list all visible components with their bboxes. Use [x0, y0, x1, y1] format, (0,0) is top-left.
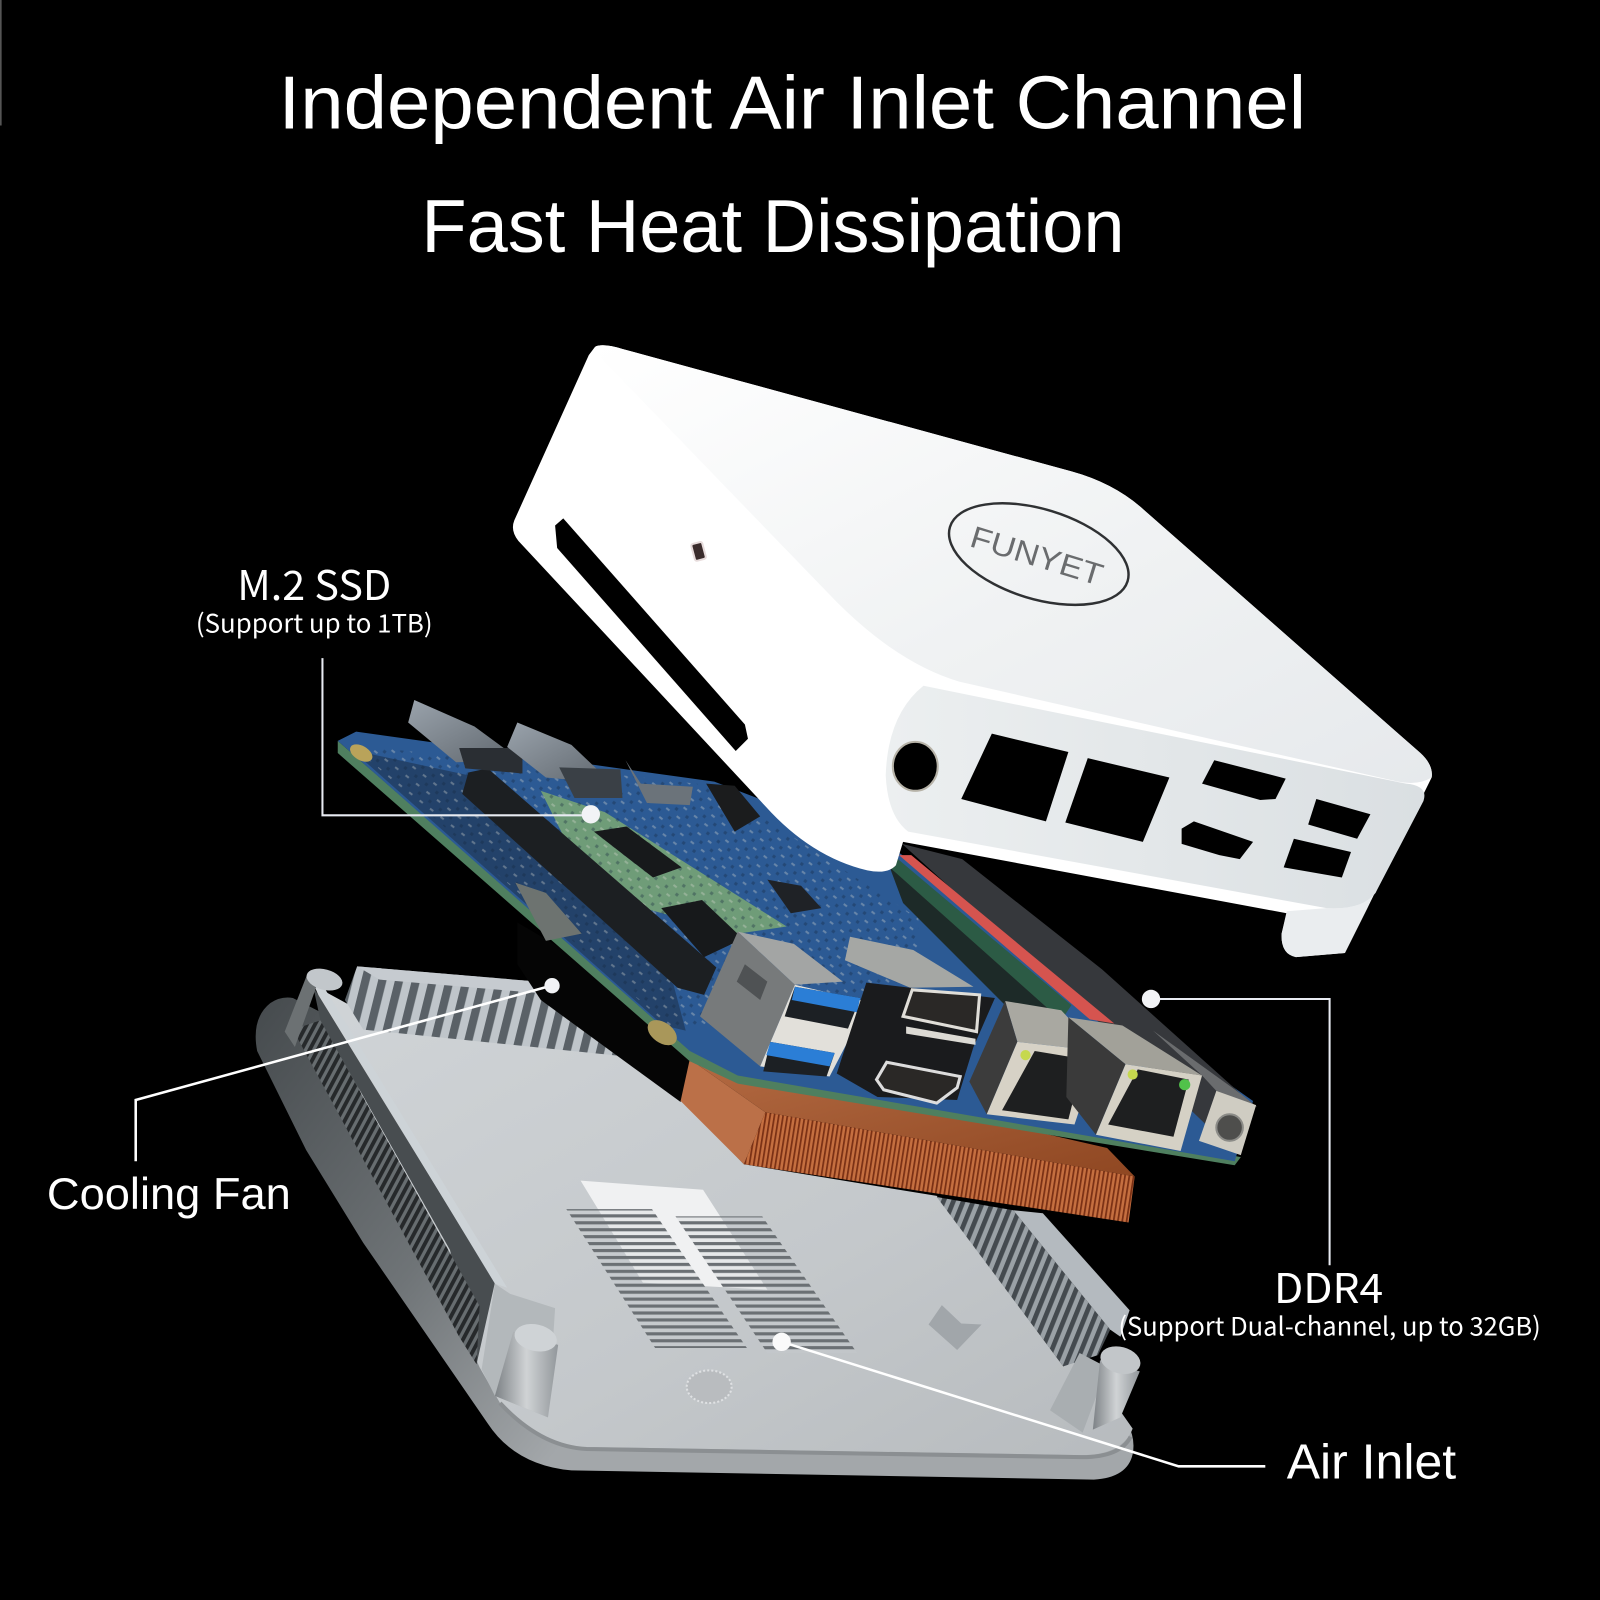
- callout: air inlet: [772, 1333, 1457, 1490]
- funyet logo: [937, 484, 1141, 624]
- outer rim: [256, 998, 1133, 1480]
- wall inner band: [313, 987, 495, 1364]
- lid top surface: [595, 345, 1432, 783]
- displayport socket: [903, 990, 980, 1032]
- logo text: FUNYET: [966, 520, 1107, 593]
- led green: [1179, 1079, 1190, 1090]
- dual usb connector: [700, 932, 868, 1077]
- right fins: [937, 1197, 1110, 1366]
- side card slot: [555, 518, 748, 751]
- led yellow: [1020, 1050, 1031, 1060]
- rj45 side: [1066, 1017, 1126, 1135]
- darker left strip: [352, 750, 686, 1031]
- usb front frame: [760, 985, 868, 1077]
- dot: [772, 1333, 791, 1351]
- post right block: [1050, 1353, 1107, 1433]
- rj45 port: [1002, 1051, 1084, 1119]
- rj45 top: [1005, 1001, 1099, 1051]
- rear fins: [345, 966, 622, 1056]
- label: Cooling Fan: [47, 1168, 291, 1219]
- rj45 front: [1096, 1064, 1202, 1151]
- tower black housing: [837, 983, 995, 1100]
- label: DDR4: [1274, 1256, 1383, 1315]
- rj45 connector 2: [1066, 1017, 1202, 1151]
- cooling fan housing: [517, 922, 690, 1102]
- memory red stripe: [899, 855, 1114, 1023]
- label: Air Inlet: [1287, 1436, 1457, 1490]
- PCB components speckle: [352, 745, 918, 1031]
- rear connector 1: [408, 700, 520, 762]
- port cutout hdmi top: [1202, 760, 1286, 800]
- PCB surface: [338, 732, 1253, 1161]
- callout: cooling fan: [47, 978, 560, 1219]
- rj45 port: [1108, 1069, 1189, 1137]
- leader line: [1151, 999, 1330, 1265]
- rj45 top: [1068, 1017, 1202, 1076]
- memory dark base: [890, 867, 1082, 1031]
- memory module pcb edge: [890, 859, 1071, 1020]
- grey rear edge near jack: [1153, 1031, 1257, 1107]
- bottom rim groove: [500, 1403, 1131, 1457]
- usb metal top: [738, 932, 843, 985]
- usb metal side: [700, 932, 795, 1066]
- green PCB area: [541, 791, 787, 934]
- rj45 connector 1: [969, 1001, 1099, 1124]
- tower top metal: [845, 937, 973, 988]
- copper top with heat pipe: [690, 1059, 1135, 1177]
- leader line: [782, 1342, 1265, 1466]
- mounting hole front: [643, 1015, 681, 1050]
- port cutout small bottom: [1284, 839, 1351, 878]
- rj45 side: [969, 1001, 1017, 1114]
- port cutout hdmi bottom: [1182, 821, 1253, 859]
- emblem on base: [687, 1370, 732, 1403]
- memory module: [890, 844, 1241, 1133]
- copper heat sink: [681, 1059, 1135, 1222]
- screw post left: [512, 1320, 559, 1355]
- leader line: [322, 658, 591, 815]
- jack body: [1199, 1091, 1256, 1155]
- port cutout small top: [1308, 799, 1370, 839]
- base floor: [314, 986, 1133, 1455]
- audio jack hole: [893, 742, 938, 791]
- label: M.2 SSD: [237, 553, 391, 612]
- post center: [929, 1305, 982, 1350]
- copper fin face: [744, 1112, 1135, 1222]
- hdmi socket: [877, 1062, 960, 1103]
- rear black capacitor: [706, 784, 760, 832]
- post top left: [285, 974, 316, 1047]
- thin edge line top left: [0, 0, 2, 126]
- rear connector 2 dark base: [559, 767, 622, 798]
- led yellow: [1128, 1069, 1138, 1080]
- recessed port panel: [886, 686, 1424, 908]
- usb side vent: [737, 964, 767, 1000]
- motherboard: [338, 700, 1257, 1165]
- inductor: [515, 883, 582, 941]
- display and hdmi connector tower: [837, 937, 995, 1103]
- rear connector 2: [507, 722, 612, 784]
- post top left cap: [304, 965, 345, 994]
- memory body: [902, 844, 1241, 1133]
- displayport lower bar: [906, 1027, 976, 1045]
- led green: [1076, 1061, 1087, 1072]
- title line 1: Independent Air Inlet Channel: [279, 62, 1306, 146]
- sublabel: (Support Dual-channel, up to 32GB): [1118, 1307, 1541, 1344]
- dot: [582, 805, 600, 823]
- leader line: [136, 986, 551, 1161]
- power jack with screw: [1199, 1091, 1256, 1155]
- bottom case: aluminium base with fins and air inlet vents: [256, 965, 1144, 1480]
- white vent highlight: [581, 1181, 767, 1290]
- rj45 front: [987, 1042, 1099, 1124]
- dot: [544, 978, 560, 993]
- rear fin top band: [357, 966, 559, 995]
- memory slot: [462, 768, 716, 995]
- vent slots left column: [566, 1209, 747, 1348]
- lid silhouette: [513, 345, 1432, 957]
- screw post right: [1097, 1342, 1144, 1378]
- rear connector 1 dark base: [459, 748, 522, 773]
- mounting hole left: [347, 741, 375, 765]
- chip 2: [661, 900, 743, 957]
- title: [279, 62, 1306, 269]
- post block bottom left: [482, 1284, 555, 1417]
- usb blue tongue bottom: [766, 1042, 835, 1066]
- chip 1: [594, 827, 682, 878]
- rear connector 3: [626, 760, 693, 805]
- vent slots right column: [676, 1216, 857, 1353]
- usb port top: [785, 987, 860, 1029]
- status led: [691, 542, 706, 561]
- left fin wall: [293, 1020, 480, 1364]
- right wall lip: [1013, 1210, 1130, 1337]
- callout: M.2 SSD: [196, 553, 600, 823]
- dot: [1142, 990, 1160, 1008]
- port cutout 1: [961, 734, 1068, 821]
- title line 2: Fast Heat Dissipation: [421, 185, 1124, 269]
- post right: [1093, 1360, 1140, 1430]
- usb port bottom: [763, 1042, 835, 1077]
- copper side: [681, 1059, 765, 1164]
- port cutout 2: [1065, 758, 1169, 842]
- screw: [1216, 1114, 1243, 1141]
- right foot: [1282, 784, 1423, 957]
- callout: DDR4: [1118, 990, 1541, 1344]
- post bottom left: [495, 1332, 558, 1417]
- logo ring: [937, 484, 1141, 624]
- sublabel: (Support up to 1TB): [196, 604, 433, 641]
- PCB edge: [338, 741, 1241, 1165]
- chip 3: [767, 880, 821, 913]
- left wall inner lip: [314, 986, 507, 1288]
- top cover: white lid: [513, 345, 1432, 957]
- usb blue tongue top: [792, 987, 860, 1012]
